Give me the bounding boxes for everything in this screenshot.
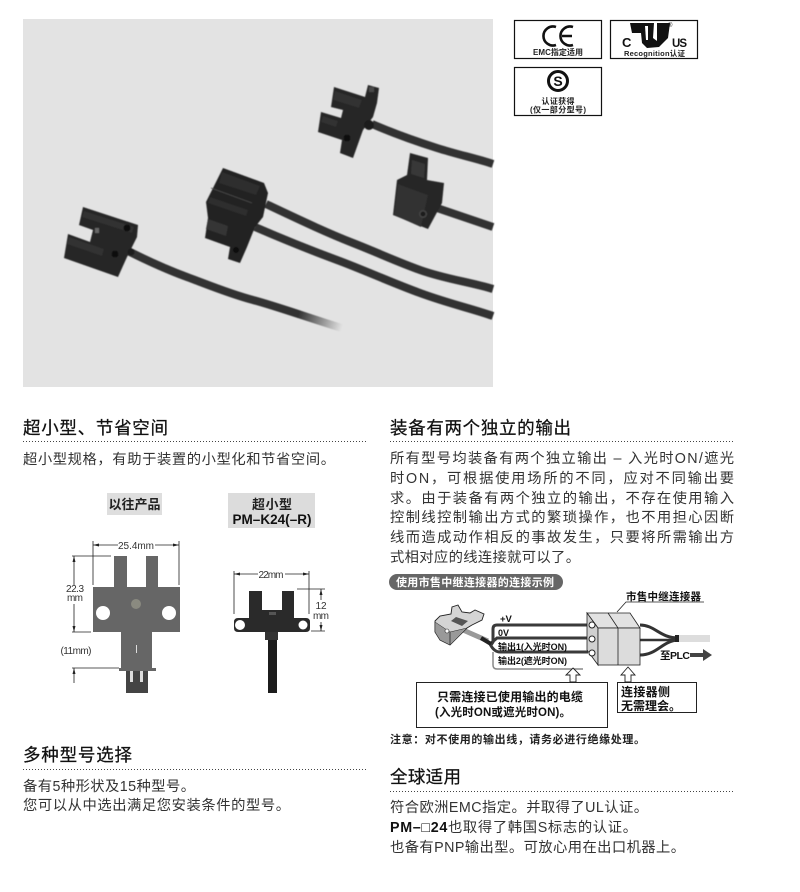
text: two outputs description: 控制线控制输出方式的繁琐操作，也不用担心因断 — [390, 508, 734, 526]
badge: CE EMC: EMC指定适用 — [533, 47, 583, 57]
wire labels: 输出1(入光时ON) — [498, 641, 567, 652]
text: two outputs description: 所有型号均装备有两个独立输出 – 入光时ON/遮光 — [390, 450, 734, 467]
diagram: PM-K24 with dimensions: 22mm — [258, 570, 284, 581]
note: insulate unused wires: 注意：对不使用的输出线，请务必进行绝缘处理。 — [390, 732, 645, 746]
badge: UL recognition: C — [622, 35, 632, 50]
panel: compact size section — [23, 418, 368, 468]
text: two outputs description — [390, 450, 734, 566]
wire labels: 输出2(遮光时ON) — [498, 655, 567, 666]
label: previous product — [107, 493, 162, 515]
badge: UL recognition: Recognition认证 — [624, 48, 686, 58]
text: global use description: 也备有PNP输出型。可放心用在出口机器上。 — [390, 839, 685, 856]
wire labels: 0V — [498, 628, 509, 638]
badge: UL recognition: ® — [668, 22, 673, 29]
callout: connect used outputs only: 只需连接已使用输出的电缆 — [437, 689, 583, 704]
connector block — [587, 613, 640, 665]
text: global use description — [390, 799, 685, 856]
panel: model variety section — [23, 745, 368, 814]
panel: two independent outputs section — [390, 418, 734, 566]
diagram: previous product with dimensions: 25.4mm — [118, 541, 154, 552]
label: previous product: 以往产品 — [108, 497, 160, 512]
sensor middle — [205, 168, 268, 263]
badge: UL recognition: US — [672, 38, 687, 50]
label pill: connection example: 使用市售中继连接器的连接示例 — [396, 575, 554, 589]
text: model variety description: 您可以从中选出满足您安装条件的型号。 — [23, 797, 290, 814]
sensor top — [318, 85, 379, 158]
badge: Korean S mark — [514, 68, 602, 116]
panel: product photo of four sensors — [23, 19, 493, 387]
diagram: previous product with dimensions: mm — [67, 593, 83, 604]
callout: connector side — [618, 682, 696, 713]
text: compact size description: 超小型规格，有助于装置的小型化和节省空间。 — [23, 451, 335, 468]
callout: connector side: 连接器侧 — [621, 684, 670, 699]
connector label: 市售中继连接器 — [626, 590, 702, 603]
badge: UL recognition — [610, 20, 698, 58]
connector label — [617, 590, 704, 612]
heading: model variety: 多种型号选择 — [23, 745, 132, 765]
text: model variety description: 备有5种形状及15种型号。 — [23, 778, 195, 795]
diagram: wiring with relay connector — [435, 590, 712, 682]
text: global use description: 符合欧洲EMC指定。并取得了UL认证。 — [390, 799, 648, 816]
label: PM-K24 ultra compact: 超小型 — [252, 497, 292, 512]
diagram: previous product with dimensions — [60, 541, 180, 693]
arrow: up to connector — [621, 667, 635, 682]
diagram: previous product with dimensions: (11mm) — [60, 646, 92, 657]
diagram: PM-K24 with dimensions — [234, 570, 329, 693]
icon: small sensor — [435, 605, 491, 645]
callout: connect used outputs only: (入光时ON或遮光时ON)。 — [435, 705, 571, 719]
text: two outputs description: 时ON，可根据使用场所的不同，应对不同输出要 — [390, 469, 734, 487]
sensor left — [64, 207, 138, 277]
badge: Korean S mark: 认证获得 — [542, 96, 574, 106]
heading: two outputs: 装备有两个独立的输出 — [390, 418, 571, 438]
badge: Korean S mark: (仅一部分型号) — [530, 104, 586, 114]
text: global use description: PM–□24也取得了韩国S标志的认证。 — [390, 819, 637, 836]
panel: global use section — [390, 767, 734, 856]
text: two outputs description: 求。由于装备有两个独立的输出，不存在使用输入 — [390, 490, 734, 507]
diagram: previous product with dimensions: 22.3 — [66, 584, 84, 595]
label: PM-K24 ultra compact: PM–K24(–R) — [232, 512, 312, 527]
text: two outputs description: 式相对应的线连接就可以了。 — [390, 548, 580, 566]
to PLC arrow: 至PLC — [660, 650, 690, 662]
to PLC arrow — [660, 649, 712, 662]
diagram: PM-K24 with dimensions: 12 — [316, 601, 327, 612]
diagram: PM-K24 with dimensions: mm — [313, 611, 329, 622]
wire labels — [498, 614, 567, 666]
label: PM-K24 ultra compact — [228, 493, 315, 528]
heading: compact size: 超小型、节省空间 — [23, 418, 168, 438]
callout: connector side: 无需理会。 — [621, 698, 681, 713]
arrow: up to output cable — [566, 668, 580, 682]
wire labels: +V — [500, 614, 513, 625]
callout: connect used outputs only — [416, 682, 608, 728]
cables — [128, 124, 493, 329]
sensor right — [393, 153, 444, 229]
heading: global use: 全球适用 — [390, 767, 461, 787]
text: model variety description — [23, 778, 290, 814]
label pill: connection example — [389, 574, 563, 590]
badge: Korean S mark: S — [553, 73, 563, 89]
badge: CE EMC — [514, 20, 602, 58]
wires — [490, 625, 710, 669]
text: two outputs description: 线而造成动作相反的事故发生，只要将所需输出方 — [390, 529, 734, 546]
